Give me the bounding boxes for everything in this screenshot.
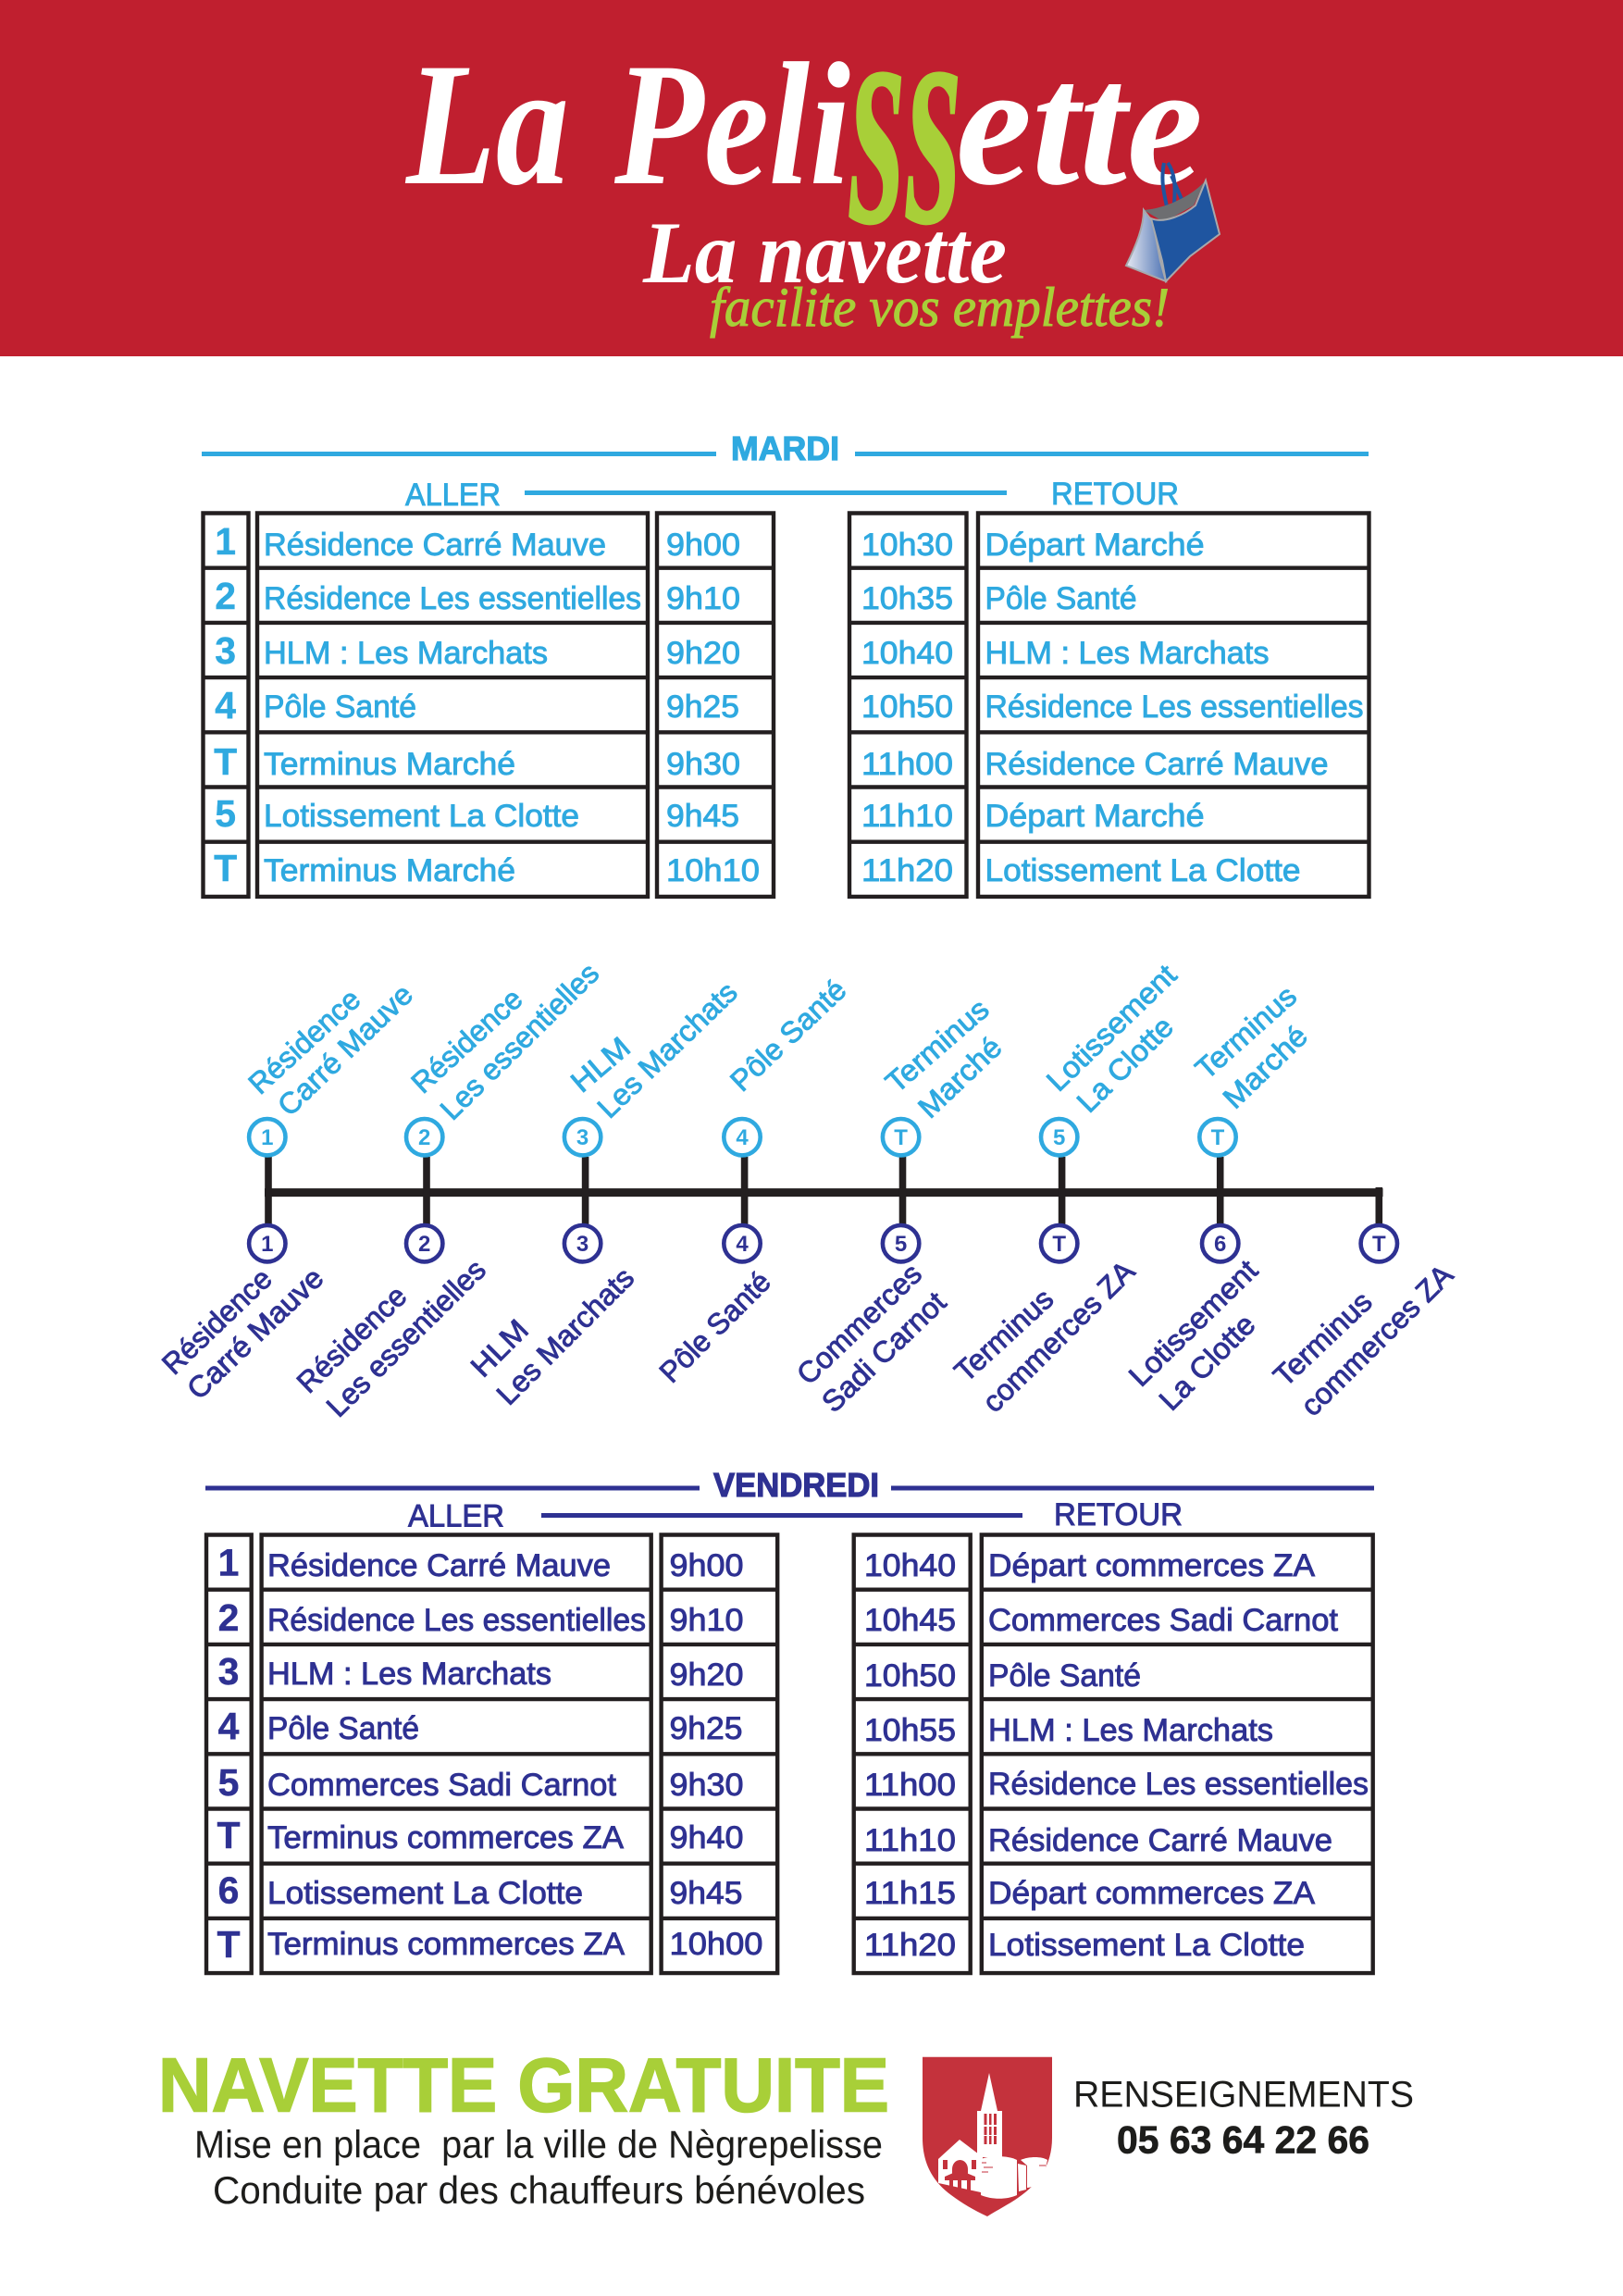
stop labels: Terminus bbox=[1189, 979, 1303, 1086]
bottom stops: vendredi bbox=[155, 1225, 1460, 1423]
stop labels: Lotissement bbox=[1040, 958, 1183, 1098]
heading: MARDI bbox=[202, 429, 1369, 467]
stop markers: 6 bbox=[1214, 1232, 1226, 1257]
stop names: mardi aller: Pôle Santé bbox=[264, 689, 416, 725]
stop labels: Résidence bbox=[404, 982, 529, 1099]
times: vendredi aller: 9h45 bbox=[670, 1876, 742, 1911]
times: vendredi retour: 10h40 bbox=[864, 1548, 956, 1583]
text: phone number: 05 63 64 22 66 bbox=[1117, 2117, 1369, 2162]
route diagram bbox=[155, 956, 1460, 1423]
text: organiser: Mise en place par la ville de Nègrepelisse bbox=[194, 2123, 883, 2166]
times: vendredi retour: 10h45 bbox=[864, 1603, 956, 1638]
subtitle: La navette: La navette bbox=[642, 204, 1007, 302]
stop names: vendredi aller: Terminus commerces ZA bbox=[267, 1820, 624, 1855]
stop labels: Carré Mauve bbox=[180, 1260, 329, 1406]
stop names: vendredi retour: Résidence Carré Mauve bbox=[988, 1823, 1332, 1858]
stop numbers: vendredi: 4 bbox=[218, 1705, 240, 1747]
stop labels: HLM bbox=[464, 1313, 535, 1384]
stop names: mardi aller: Terminus Marché bbox=[264, 853, 515, 888]
stop labels bbox=[242, 956, 1314, 1126]
stop names: mardi retour: Résidence Carré Mauve bbox=[985, 747, 1329, 782]
stop names: mardi aller: HLM : Les Marchats bbox=[264, 636, 548, 671]
stop labels: Pôle Santé bbox=[652, 1265, 777, 1389]
stop markers bbox=[249, 1119, 1236, 1155]
stop markers: 2 bbox=[418, 1232, 430, 1257]
times: vendredi retour bbox=[864, 1548, 956, 1963]
times: mardi aller: 10h10 bbox=[666, 853, 760, 888]
stop names: vendredi retour: Commerces Sadi Carnot bbox=[988, 1603, 1339, 1638]
heading: MARDI: MARDI bbox=[731, 429, 839, 467]
column heading: RETOUR: RETOUR bbox=[1054, 1497, 1183, 1533]
column heading: ALLER: ALLER bbox=[405, 478, 501, 513]
stop names: mardi retour bbox=[985, 527, 1364, 888]
stop labels: Pôle Santé bbox=[724, 973, 852, 1098]
stop names: vendredi retour: Résidence Les essentielles bbox=[988, 1767, 1369, 1802]
stop names: vendredi aller bbox=[267, 1548, 646, 1962]
times: mardi retour bbox=[861, 527, 953, 888]
table grid: vendredi aller bbox=[206, 1534, 777, 1973]
times: mardi retour: 10h35 bbox=[861, 581, 953, 616]
title: La Pelissette: La bbox=[404, 28, 569, 222]
stop names: vendredi retour: Lotissement La Clotte bbox=[988, 1928, 1305, 1963]
stop labels: Marché bbox=[911, 1030, 1009, 1124]
text: information label: RENSEIGNEMENTS bbox=[1073, 2075, 1414, 2116]
stop markers: 3 bbox=[576, 1232, 588, 1257]
stop labels: commerces ZA bbox=[1295, 1258, 1460, 1422]
stop markers: T bbox=[894, 1125, 908, 1150]
stop names: vendredi aller: Lotissement La Clotte bbox=[267, 1876, 583, 1911]
stop names: mardi retour: Départ Marché bbox=[985, 799, 1205, 834]
times: vendredi aller: 9h30 bbox=[670, 1768, 744, 1803]
stop numbers: mardi: 2 bbox=[215, 575, 236, 617]
panel: vendredi schedule bbox=[205, 1466, 1374, 1973]
stop names: mardi aller bbox=[264, 527, 641, 888]
times: mardi retour: 11h10 bbox=[861, 799, 953, 834]
stop markers: 3 bbox=[576, 1125, 588, 1150]
stop markers: 1 bbox=[261, 1125, 273, 1150]
stop names: vendredi retour: HLM : Les Marchats bbox=[988, 1713, 1273, 1748]
times: mardi retour: 10h30 bbox=[861, 527, 953, 563]
stop numbers: vendredi bbox=[217, 1542, 241, 1966]
stop names: vendredi retour bbox=[988, 1548, 1369, 1963]
stop labels: Terminus bbox=[1267, 1285, 1379, 1393]
stop numbers: vendredi: 5 bbox=[218, 1761, 239, 1804]
stop names: vendredi retour: Départ commerces ZA bbox=[988, 1876, 1315, 1911]
stop names: vendredi aller: HLM : Les Marchats bbox=[267, 1657, 551, 1692]
heading: NAVETTE GRATUITE: NAVETTE GRATUITE bbox=[158, 2042, 889, 2128]
stop labels: Les Marchats bbox=[489, 1260, 640, 1411]
stop markers: 4 bbox=[736, 1232, 749, 1257]
stop labels: Carré Mauve bbox=[271, 977, 419, 1123]
stop markers bbox=[249, 1225, 1397, 1261]
stop labels: Sadi Carnot bbox=[815, 1285, 952, 1419]
divider between aller and retour bbox=[525, 490, 1007, 495]
stop names: vendredi retour: Départ commerces ZA bbox=[988, 1548, 1315, 1583]
stop names: mardi retour: Pôle Santé bbox=[985, 581, 1136, 616]
stop names: vendredi aller: Résidence Carré Mauve bbox=[267, 1548, 611, 1583]
stop names: mardi retour: HLM : Les Marchats bbox=[985, 636, 1270, 671]
icon: town coat of arms bbox=[923, 2057, 1052, 2216]
stop labels: HLM bbox=[564, 1030, 637, 1098]
heading: VENDREDI: VENDREDI bbox=[713, 1466, 879, 1504]
footer bbox=[158, 2042, 1414, 2216]
stop markers: 1 bbox=[261, 1232, 273, 1257]
times: vendredi retour: 11h20 bbox=[864, 1928, 956, 1963]
times: mardi aller: 9h10 bbox=[666, 581, 740, 616]
stop numbers: vendredi: 3 bbox=[218, 1650, 239, 1693]
stop names: vendredi aller: Commerces Sadi Carnot bbox=[267, 1768, 617, 1803]
times: vendredi aller: 9h10 bbox=[670, 1603, 744, 1638]
times: mardi aller: 9h30 bbox=[666, 747, 740, 782]
stop labels: Commerces bbox=[790, 1257, 928, 1391]
stop numbers: mardi: 5 bbox=[215, 792, 236, 835]
stop numbers: vendredi: 6 bbox=[218, 1869, 239, 1912]
stop numbers: vendredi: T bbox=[217, 1814, 241, 1856]
stop names: mardi retour: Départ Marché bbox=[985, 527, 1205, 563]
divider between aller and retour bbox=[541, 1513, 1022, 1518]
times: vendredi aller bbox=[670, 1548, 762, 1962]
title: La Pelissette bbox=[404, 0, 1203, 292]
stop labels: Résidence bbox=[291, 1279, 413, 1399]
stop names: vendredi aller: Pôle Santé bbox=[267, 1711, 419, 1746]
icon: shopping bag bbox=[1126, 163, 1220, 281]
times: mardi retour: 10h40 bbox=[861, 636, 953, 671]
stop numbers: vendredi: T bbox=[217, 1923, 241, 1966]
times: mardi aller bbox=[666, 527, 760, 888]
table grid: mardi retour bbox=[849, 513, 1369, 897]
stop labels bbox=[155, 1253, 1460, 1423]
times: mardi retour: 11h20 bbox=[861, 853, 953, 888]
text: drivers: Conduite par des chauffeurs bénévoles bbox=[213, 2168, 865, 2212]
times: mardi aller: 9h25 bbox=[666, 689, 739, 725]
route line bbox=[265, 1188, 1382, 1197]
table grid: vendredi retour bbox=[854, 1534, 1373, 1973]
panel: mardi schedule bbox=[202, 429, 1369, 897]
times: mardi aller: 9h20 bbox=[666, 636, 740, 671]
column heading: ALLER: ALLER bbox=[408, 1499, 504, 1534]
stop labels: Les Marchats bbox=[590, 975, 744, 1124]
stop markers: 5 bbox=[1053, 1125, 1065, 1150]
stop names: mardi aller: Résidence Les essentielles bbox=[264, 581, 641, 616]
tagline: facilite vos emplettes! bbox=[710, 277, 1170, 338]
times: vendredi retour: 11h10 bbox=[864, 1823, 956, 1858]
stop labels: Marché bbox=[1217, 1019, 1314, 1115]
times: vendredi aller: 9h00 bbox=[670, 1548, 744, 1583]
title: La Pelissette: Peli bbox=[613, 28, 850, 222]
top stops: mardi bbox=[242, 956, 1314, 1155]
times: vendredi retour: 11h15 bbox=[864, 1876, 956, 1911]
stop labels: Terminus bbox=[879, 992, 995, 1099]
stop names: mardi aller: Lotissement La Clotte bbox=[264, 799, 579, 834]
stop numbers: mardi: T bbox=[214, 847, 237, 889]
stop markers: T bbox=[1372, 1232, 1386, 1257]
column heading: RETOUR: RETOUR bbox=[1051, 477, 1179, 512]
heading: VENDREDI bbox=[205, 1466, 1374, 1504]
stop labels: Résidence bbox=[155, 1261, 279, 1381]
stop names: mardi retour: Résidence Les essentielles bbox=[985, 689, 1364, 725]
times: vendredi retour: 10h50 bbox=[864, 1658, 956, 1694]
stop labels: Terminus bbox=[948, 1282, 1059, 1388]
stop names: vendredi retour: Pôle Santé bbox=[988, 1658, 1141, 1694]
times: mardi aller: 9h00 bbox=[666, 527, 740, 563]
stop numbers: vendredi: 1 bbox=[218, 1542, 239, 1584]
stop numbers: mardi: 3 bbox=[215, 629, 236, 672]
stop labels: Les essentielles bbox=[320, 1253, 492, 1423]
times: vendredi aller: 9h40 bbox=[670, 1820, 744, 1855]
times: vendredi retour: 11h00 bbox=[864, 1768, 956, 1803]
times: mardi retour: 11h00 bbox=[861, 747, 953, 782]
stop markers: T bbox=[1052, 1232, 1066, 1257]
table grid: mardi aller bbox=[204, 513, 774, 897]
times: vendredi retour: 10h55 bbox=[864, 1713, 956, 1748]
stop ticks bbox=[268, 1157, 1379, 1224]
times: vendredi aller: 10h00 bbox=[670, 1927, 762, 1962]
stop names: mardi aller: Terminus Marché bbox=[264, 747, 515, 782]
stop names: vendredi aller: Résidence Les essentielles bbox=[267, 1603, 646, 1638]
stop labels: La Clotte bbox=[1152, 1308, 1262, 1417]
stop labels: La Clotte bbox=[1071, 1010, 1180, 1119]
stop numbers: mardi: T bbox=[214, 740, 237, 783]
stop names: vendredi aller: Terminus commerces ZA bbox=[267, 1927, 625, 1962]
stop markers: 4 bbox=[736, 1125, 749, 1150]
stop numbers: mardi bbox=[214, 520, 237, 889]
times: mardi retour: 10h50 bbox=[861, 689, 953, 725]
stop labels: Résidence bbox=[242, 982, 366, 1100]
header banner bbox=[0, 0, 1623, 356]
stop numbers: mardi: 4 bbox=[215, 684, 236, 726]
times: mardi aller: 9h45 bbox=[666, 799, 739, 834]
times: vendredi aller: 9h20 bbox=[670, 1657, 744, 1693]
stop markers: 5 bbox=[895, 1232, 907, 1257]
times: vendredi aller: 9h25 bbox=[670, 1711, 742, 1746]
stop markers: 2 bbox=[418, 1125, 430, 1150]
stop labels: Les essentielles bbox=[434, 956, 605, 1126]
stop numbers: mardi: 1 bbox=[215, 520, 236, 563]
stop markers: T bbox=[1211, 1125, 1225, 1150]
stop names: mardi retour: Lotissement La Clotte bbox=[985, 853, 1301, 888]
title: La Pelissette: ette bbox=[956, 28, 1203, 222]
stop labels: commerces ZA bbox=[976, 1254, 1142, 1419]
stop names: mardi aller: Résidence Carré Mauve bbox=[264, 527, 606, 563]
stop numbers: vendredi: 2 bbox=[218, 1596, 239, 1639]
stop labels: Lotissement bbox=[1122, 1253, 1264, 1393]
